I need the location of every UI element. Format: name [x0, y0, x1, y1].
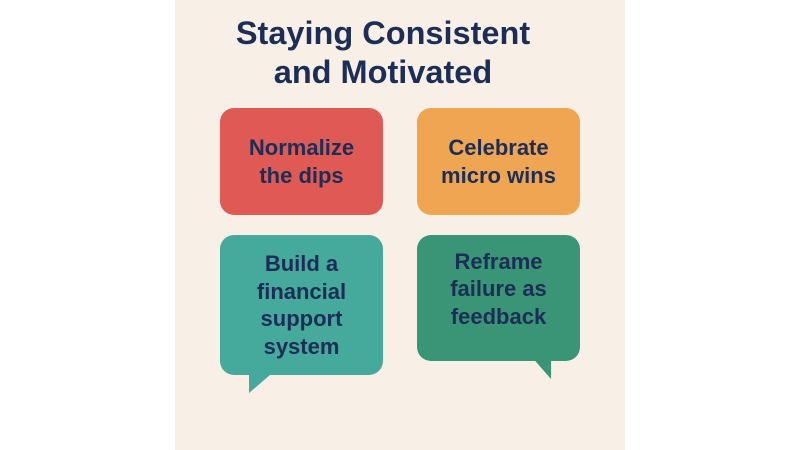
speech bubble: reframe failure: failure as: [450, 276, 547, 301]
speech bubble: build support system: [220, 235, 383, 393]
title: [236, 15, 530, 90]
speech bubble: build support system: Build a: [265, 251, 338, 276]
speech bubble: reframe failure: Reframe: [454, 249, 543, 274]
title: and Motivated: [274, 54, 492, 90]
card: celebrate micro wins: Celebrate: [448, 135, 549, 160]
speech bubble: build support system: system: [264, 334, 339, 358]
card: normalize the dips: the dips: [259, 162, 344, 188]
card: celebrate micro wins: [417, 108, 580, 215]
background panel: [175, 0, 625, 450]
card: celebrate micro wins: micro wins: [441, 162, 556, 188]
title: Staying Consistent: [236, 15, 530, 51]
speech bubble: build support system: financial: [257, 278, 346, 304]
speech bubble: reframe failure: feedback: [451, 304, 546, 329]
speech bubble: reframe failure: [417, 235, 580, 379]
card: normalize the dips: Normalize: [249, 135, 354, 160]
speech bubble: build support system: support: [261, 306, 342, 331]
card: normalize the dips: [220, 108, 383, 215]
